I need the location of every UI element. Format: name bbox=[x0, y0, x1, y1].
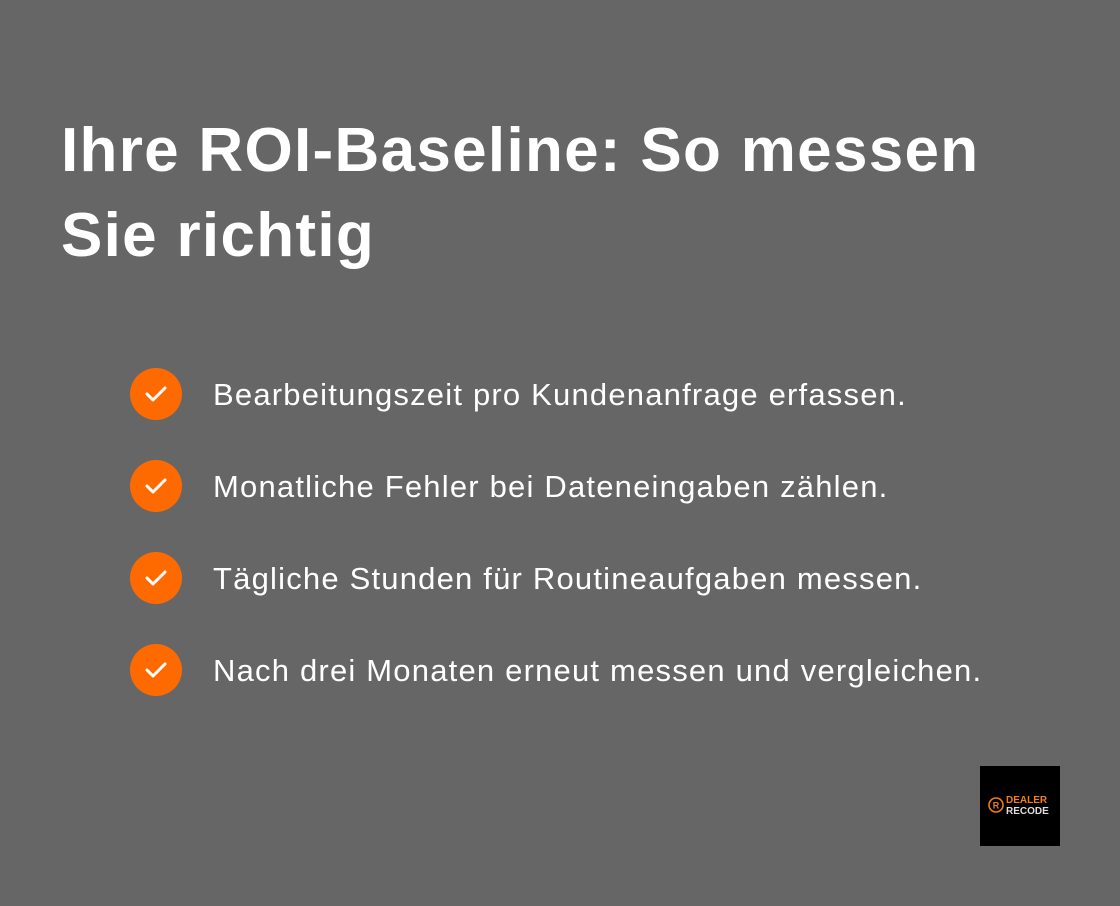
logo: Dealer Recode: R bbox=[993, 800, 1000, 810]
item 4: Nach drei Monaten erneut messen und vergleichen. bbox=[213, 653, 982, 688]
logo: Dealer Recode: RECODE bbox=[1006, 806, 1049, 817]
checklist bbox=[130, 368, 982, 696]
logo: Dealer Recode: DEALER bbox=[1006, 795, 1048, 806]
item 4 bbox=[130, 644, 982, 696]
title: Ihre ROI-Baseline: So messen bbox=[61, 116, 979, 185]
item 3: Tägliche Stunden für Routineaufgaben messen. bbox=[213, 561, 922, 596]
item 2 bbox=[130, 460, 888, 512]
title: Sie richtig bbox=[61, 201, 375, 270]
item 1 bbox=[130, 368, 907, 420]
title bbox=[61, 116, 979, 270]
logo: Dealer Recode bbox=[980, 766, 1060, 846]
item 2: Monatliche Fehler bei Dateneingaben zählen. bbox=[213, 469, 888, 504]
item 1: Bearbeitungszeit pro Kundenanfrage erfassen. bbox=[213, 377, 907, 412]
item 3 bbox=[130, 552, 922, 604]
